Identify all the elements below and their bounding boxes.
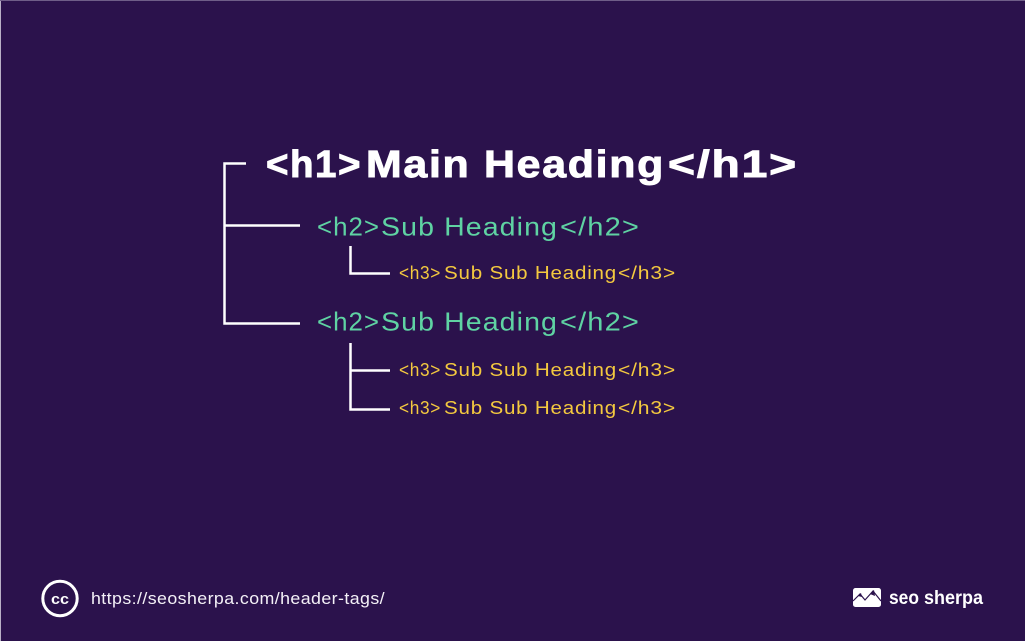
h2 sub heading one: Sub Heading <box>381 212 558 242</box>
logo wordmark <box>889 588 983 609</box>
outer hierarchy bracket <box>224 164 300 324</box>
h1 main heading: Main Heading <box>366 144 665 186</box>
icon: mountain badge <box>853 588 881 607</box>
source url: https://seosherpa.com/header-tags/ <box>91 589 385 608</box>
h3 sub sub heading three: </h3> <box>618 398 676 418</box>
h3 sub sub heading one <box>399 263 676 283</box>
h3 sub sub heading one: <h3> <box>399 263 441 283</box>
logo wordmark: sherpa <box>924 588 983 609</box>
h1 main heading: <h1> <box>266 144 362 186</box>
second h3 connector <box>350 343 390 410</box>
h3 sub sub heading three <box>399 398 676 418</box>
h3 sub sub heading three: Sub Sub Heading <box>444 398 617 418</box>
h2 sub heading two: <h2> <box>317 306 380 336</box>
icon: creative commons: cc <box>51 591 69 608</box>
h1 main heading <box>266 144 798 186</box>
h3 sub sub heading two <box>399 360 676 380</box>
h2 sub heading two <box>317 306 640 336</box>
h2 sub heading one <box>317 212 640 242</box>
h3 sub sub heading one: </h3> <box>618 263 676 283</box>
logo wordmark: seo <box>889 588 919 609</box>
seo sherpa logo <box>853 588 983 609</box>
h2 sub heading one: </h2> <box>560 212 640 242</box>
h1 main heading: </h1> <box>668 144 798 186</box>
h3 sub sub heading two: Sub Sub Heading <box>444 360 617 380</box>
h2 sub heading two: </h2> <box>560 306 640 336</box>
first h3 connector <box>350 246 390 274</box>
h2 sub heading one: <h2> <box>317 212 380 242</box>
icon: creative commons <box>43 581 77 616</box>
h3 sub sub heading two: </h3> <box>618 360 676 380</box>
h2 sub heading two: Sub Heading <box>381 306 558 336</box>
h3 sub sub heading two: <h3> <box>399 360 441 380</box>
h3 sub sub heading one: Sub Sub Heading <box>444 263 617 283</box>
h3 sub sub heading three: <h3> <box>399 398 441 418</box>
